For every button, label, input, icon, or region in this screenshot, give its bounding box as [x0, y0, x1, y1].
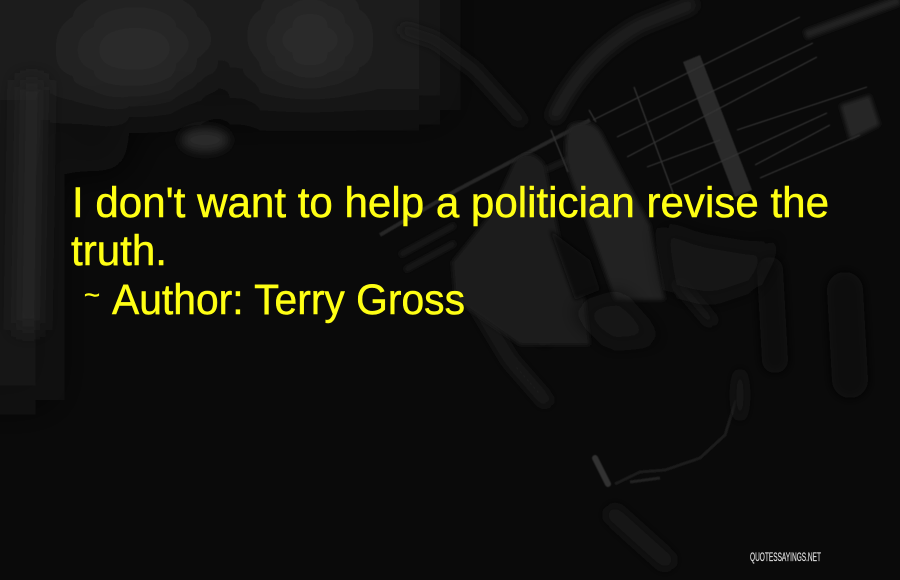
author name: Author: Terry Gross [112, 276, 465, 324]
bracelet at wrist [595, 400, 736, 484]
tilde: ~ [84, 282, 100, 309]
watermark: QUOTESSAYINGS.NET [750, 550, 821, 564]
quote line 1: I don't want to help a politician revise the [72, 179, 829, 227]
back of hand [660, 225, 780, 300]
blurred shapes: upper-left shoulder and arm [0, 0, 440, 400]
index fingertip [565, 122, 665, 300]
blurred shape: small highlight near left [181, 128, 229, 152]
palm lower [575, 295, 660, 345]
headstock band [805, 0, 900, 35]
blurred shape: left vertical arm band [28, 80, 32, 330]
guitar saddle bar [683, 55, 752, 197]
fingers and hand [452, 122, 780, 345]
guitar frets [551, 87, 673, 193]
quote text [71, 179, 829, 275]
middle finger [452, 154, 590, 345]
guitar neck [380, 120, 590, 235]
blurred shapes: background stems and right side [405, 30, 850, 560]
finger gap shadow [550, 230, 600, 300]
guitar strings [593, 17, 867, 185]
lower neck bands [400, 150, 590, 270]
author attribution [84, 276, 465, 324]
blurred shape: curved arm above the neck [555, 5, 690, 115]
right bridge pins [840, 95, 880, 140]
quote line 2: truth. [71, 227, 167, 275]
wrist patch [733, 369, 747, 421]
